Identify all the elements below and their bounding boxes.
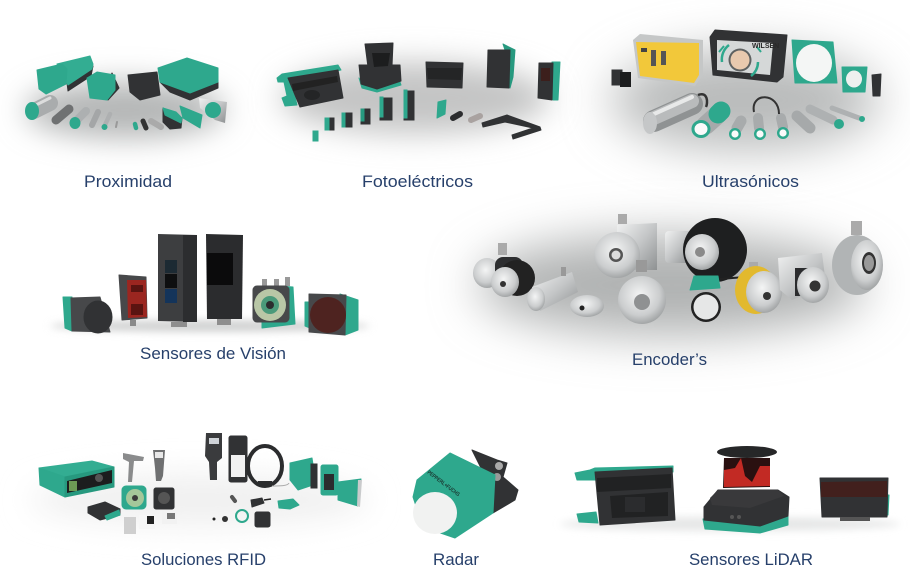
label: Radar	[433, 551, 480, 569]
product: yellow encoder	[735, 262, 782, 314]
label: Encoder’s	[632, 351, 707, 369]
panel: Sensores de Visión	[50, 234, 370, 363]
panel: Proximidad	[25, 56, 227, 191]
product: red sensor	[119, 275, 147, 326]
product: cylinder camera	[63, 297, 112, 333]
label: Proximidad	[84, 173, 172, 191]
panel: Radar	[413, 450, 518, 569]
shadow	[610, 50, 880, 150]
product: small parts	[212, 497, 299, 527]
product: tall vision sensors	[158, 234, 243, 327]
product group: left encoders	[473, 243, 604, 317]
product: teal RFID heads	[290, 458, 362, 507]
panel: Encoder's	[473, 214, 883, 369]
product: Wilsen sensor: WILSEN	[752, 43, 779, 50]
product: readers and tags	[88, 486, 177, 534]
product group: ultrasonic cylinders	[643, 94, 864, 140]
product: scanner tower	[359, 43, 401, 92]
product: area scanner	[575, 466, 675, 525]
product: teal sensor and wheel	[690, 276, 745, 322]
panel: Soluciones RFID	[30, 433, 370, 569]
product group: cylinders	[26, 98, 117, 130]
shadow	[25, 82, 225, 138]
product group: small sensors	[135, 98, 227, 129]
product: black pair	[612, 70, 631, 87]
product: handheld scanners	[123, 450, 165, 482]
label: Soluciones RFID	[141, 551, 266, 569]
product: dark sensors	[426, 44, 560, 100]
shadow	[280, 62, 550, 134]
product: radar sensor: PEPPERL+FUCHS	[426, 470, 461, 498]
product group: small photo sensors	[313, 90, 480, 141]
panel: Ultrasónicos	[610, 30, 881, 191]
product: LiDAR tower	[703, 446, 789, 533]
product: ring antenna	[248, 446, 289, 486]
product: black ring encoder	[665, 218, 747, 282]
floor shadow	[560, 517, 900, 531]
product: yellow control box	[633, 34, 703, 86]
product group: block sensors	[37, 56, 218, 100]
floor shadow	[50, 320, 370, 332]
product: Wilsen sensor	[710, 30, 787, 82]
product group: centre silver encoders	[594, 214, 666, 324]
product: teal reader box	[39, 461, 114, 497]
shadow	[477, 235, 867, 335]
product: fork sensor	[482, 115, 541, 139]
product: dial camera	[253, 277, 295, 328]
product group: right encoders	[778, 221, 883, 303]
product: area sensor	[277, 65, 343, 107]
product: compact scanner	[820, 478, 889, 521]
product: handheld RFID	[205, 433, 247, 482]
floor shadow	[30, 474, 370, 526]
product: red lens camera	[305, 294, 358, 335]
label: Sensores LiDAR	[689, 551, 813, 569]
label: Fotoeléctricos	[362, 173, 473, 191]
label: Ultrasónicos	[702, 173, 799, 191]
label: Sensores de Visión	[140, 345, 286, 363]
panel: Fotoeléctricos	[277, 43, 560, 191]
product: teal ring sensors	[792, 40, 881, 96]
panel: Sensores LiDAR	[560, 446, 900, 569]
